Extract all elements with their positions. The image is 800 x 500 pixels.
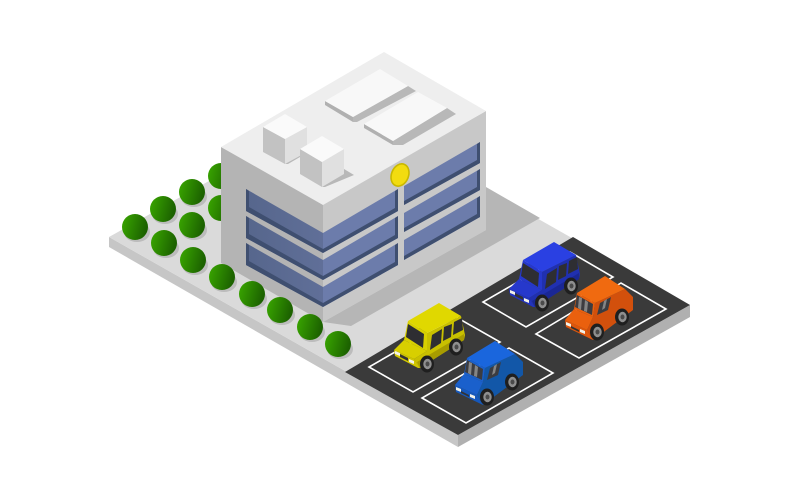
car: dark blue SUV	[509, 242, 580, 312]
base platform	[109, 107, 690, 447]
building	[221, 52, 486, 322]
right wall	[323, 111, 486, 322]
roof	[221, 52, 486, 205]
rooftop cube 2	[300, 136, 354, 187]
right wall windows, left section	[323, 189, 398, 307]
building shadow	[323, 187, 540, 326]
rooftop panel 2	[364, 92, 456, 145]
parking space lines	[369, 252, 666, 423]
car: orange van	[565, 276, 633, 340]
trees	[122, 163, 234, 275]
right wall windows, right section	[404, 142, 480, 260]
parking asphalt	[345, 237, 690, 435]
car: yellow SUV	[394, 303, 465, 372]
yellow sign	[388, 161, 412, 189]
rooftop panel 1	[325, 69, 416, 122]
car: blue van	[455, 341, 523, 406]
front row of trees	[209, 264, 353, 359]
left wall windows	[246, 189, 323, 307]
left wall	[221, 147, 323, 322]
rooftop cube 1	[263, 114, 307, 164]
